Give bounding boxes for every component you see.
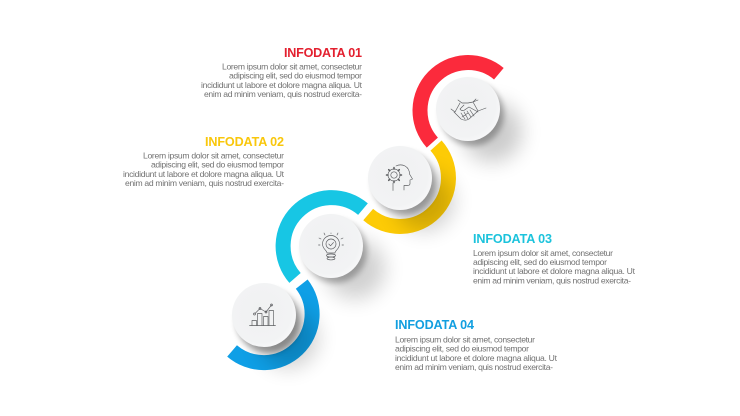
text block: infodata 02 xyxy=(123,135,285,188)
text block: infodata 03: incididunt ut labore et dolore magna aliqua. Ut xyxy=(473,266,636,276)
text block: infodata 03: adipiscing elit, sed do eiusmod tempor xyxy=(473,257,607,267)
arc: red segment xyxy=(420,63,499,143)
text block: infodata 03: enim ad minim veniam, quis nostrud exercita- xyxy=(473,275,631,285)
icon: handshake xyxy=(451,99,486,120)
text block: infodata 01: INFODATA 01 xyxy=(284,46,362,60)
text block: infodata 01: enim ad minim veniam, quis nostrud exercita- xyxy=(204,89,362,99)
text block: infodata 02: Lorem ipsum dolor sit amet, consectetur xyxy=(143,150,284,160)
text block: infodata 03 xyxy=(473,232,636,285)
arc: yellow segment xyxy=(368,146,448,226)
text block: infodata 02: incididunt ut labore et dolore magna aliqua. Ut xyxy=(123,169,285,179)
arc: blue segment xyxy=(232,284,312,363)
arc: cyan segment xyxy=(283,198,363,278)
icon: bar chart xyxy=(250,304,276,326)
text block: infodata 04: Lorem ipsum dolor sit amet, consectetur xyxy=(395,334,535,344)
text block: infodata 02: INFODATA 02 xyxy=(205,135,284,149)
text block: infodata 03: Lorem ipsum dolor sit amet, consectetur xyxy=(473,248,613,258)
text block: infodata 04: INFODATA 04 xyxy=(395,318,474,332)
circle: step 1 handshake xyxy=(436,77,522,162)
text block: infodata 04: incididunt ut labore et dolore magna aliqua. Ut xyxy=(395,353,558,363)
text block: infodata 04: enim ad minim veniam, quis nostrud exercita- xyxy=(395,362,553,372)
text block: infodata 01: Lorem ipsum dolor sit amet, consectetur xyxy=(222,62,362,72)
icon: head with gear xyxy=(386,165,412,190)
text block: infodata 03: INFODATA 03 xyxy=(473,232,552,246)
text block: infodata 04: adipiscing elit, sed do eiusmod tempor xyxy=(395,344,529,354)
text block: infodata 02: adipiscing elit, sed do eiusmod tempor xyxy=(151,160,284,170)
circle: step 3 light bulb xyxy=(299,214,385,299)
text block: infodata 01: incididunt ut labore et dolore magna aliqua. Ut xyxy=(201,80,363,90)
icon: light bulb xyxy=(318,233,344,260)
text block: infodata 01: adipiscing elit, sed do eiusmod tempor xyxy=(229,71,362,81)
text block: infodata 04 xyxy=(395,318,558,372)
circle: step 4 bar chart xyxy=(232,283,318,368)
text block: infodata 01 xyxy=(201,46,363,99)
text block: infodata 02: enim ad minim veniam, quis nostrud exercita- xyxy=(125,178,284,188)
circle: step 2 head and gear xyxy=(368,146,454,231)
